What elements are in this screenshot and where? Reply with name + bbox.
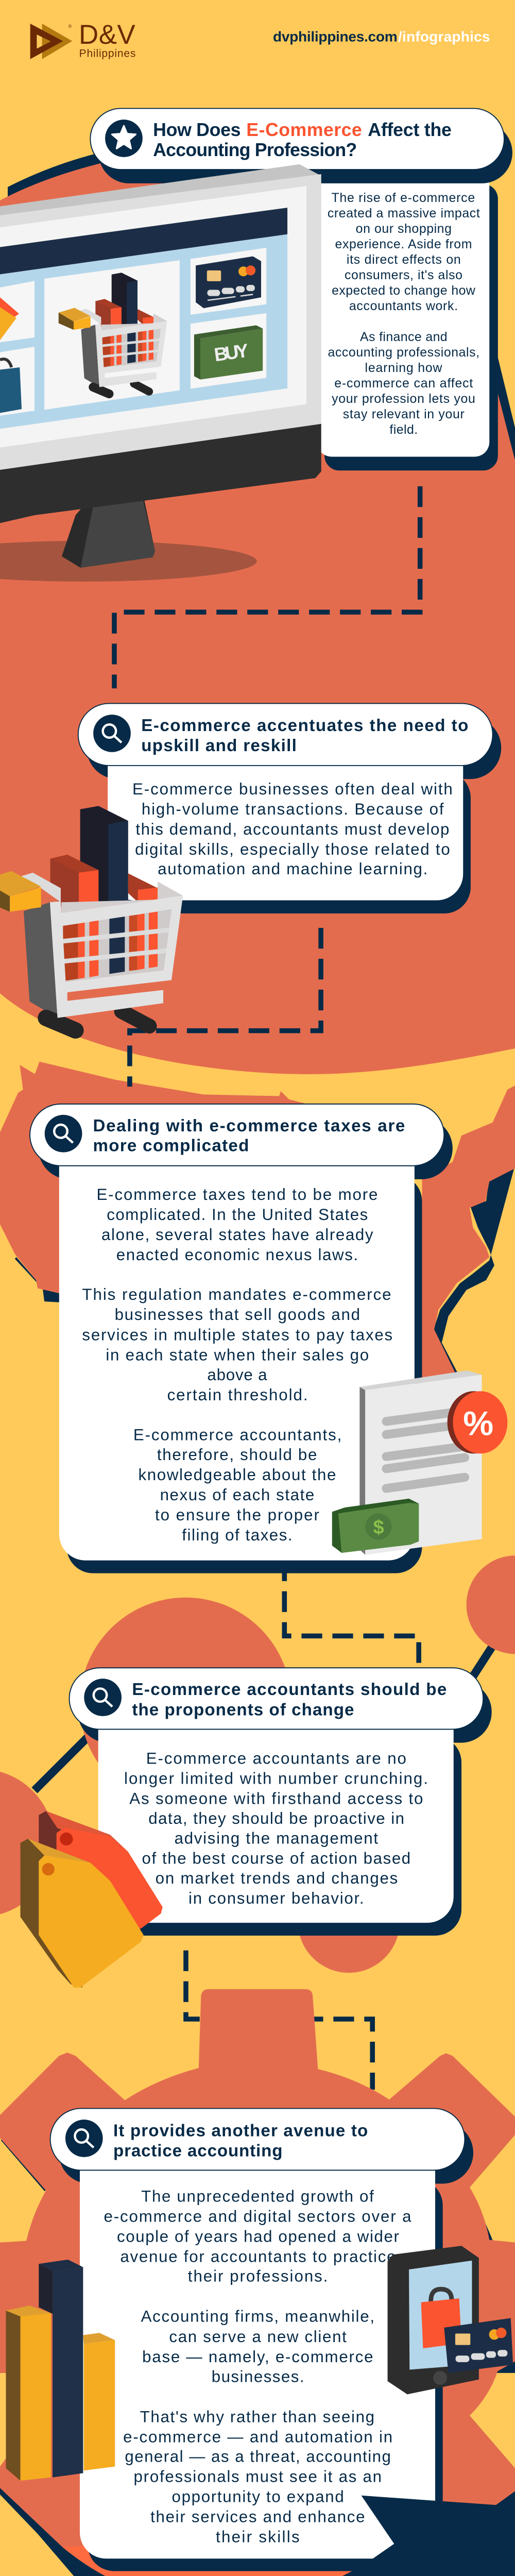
panel: intro text card: created a massive impact <box>328 206 480 221</box>
website url: dvphilippines.com <box>273 28 398 44</box>
panel: another avenue: opportunity to expand <box>172 2488 344 2506</box>
icon: computer monitor with online store <box>0 164 321 568</box>
panel: e-commerce taxes: more complicated <box>93 1137 249 1156</box>
panel: upskill and reskill: E-commerce accentuates the need to <box>141 716 468 735</box>
panel: e-commerce taxes: to ensure the proper <box>155 1506 319 1524</box>
title pill: Accounting Profession? <box>153 140 357 160</box>
panel: intro text card: on our shopping <box>356 222 452 236</box>
panel: e-commerce taxes: services in multiple states to pay taxes <box>82 1326 392 1344</box>
panel: e-commerce taxes: above a <box>207 1366 267 1384</box>
panel: proponents of change: the proponents of change <box>132 1701 354 1720</box>
panel: proponents of change: E-commerce accountants are no <box>146 1749 406 1767</box>
panel: proponents of change: in consumer behavior. <box>188 1889 364 1907</box>
icon: tax document with percent badge and cash: % <box>463 1405 493 1443</box>
panel: proponents of change: As someone with firsthand access to <box>129 1789 423 1807</box>
panel: e-commerce taxes: in each state when their sales go <box>106 1346 369 1364</box>
panel: upskill and reskill: automation and machine learning. <box>158 860 427 878</box>
panel: e-commerce taxes: This regulation mandates e-commerce <box>82 1285 391 1303</box>
network circles background <box>0 1555 515 1973</box>
panel: another avenue: base — namely, e-commerce <box>142 2348 373 2366</box>
panel: e-commerce taxes: E-commerce accountants, <box>133 1426 341 1444</box>
panel: another avenue: practice accounting <box>113 2142 282 2161</box>
panel: intro text card: expected to change how <box>332 283 476 298</box>
panel: proponents of change: of the best course of action based <box>142 1849 410 1867</box>
icon: bar chart <box>6 2260 115 2481</box>
website url: /infographics <box>398 28 490 44</box>
title pill: E-Commerce <box>246 120 362 140</box>
panel: proponents of change: advising the management <box>175 1829 378 1847</box>
panel: intro text card <box>317 171 498 470</box>
panel: e-commerce taxes: complicated. In the United States <box>107 1206 368 1224</box>
panel: upskill and reskill: upskill and reskill <box>141 736 297 755</box>
panel: another avenue <box>50 2108 473 2571</box>
logo: D&V <box>79 20 135 50</box>
panel: intro text card: The rise of e-commerce <box>331 191 475 205</box>
panel: upskill and reskill: high-volume transactions. Because of <box>142 800 444 818</box>
panel: another avenue: their services and enhance <box>150 2507 365 2526</box>
gear background <box>0 1989 515 2576</box>
panel: another avenue: It provides another avenue to <box>113 2122 368 2141</box>
panel: another avenue: couple of years had opened a wider <box>117 2227 399 2245</box>
panel: upskill and reskill: digital skills, especially those related to <box>135 840 450 858</box>
panel: another avenue: professionals must see it as an <box>134 2468 382 2486</box>
panel: e-commerce taxes: filing of taxes. <box>182 1526 293 1544</box>
panel: e-commerce taxes: Dealing with e-commerce taxes are <box>93 1116 405 1136</box>
panel: another avenue: e-commerce and digital sectors over a <box>104 2208 411 2226</box>
panel: upskill and reskill <box>78 703 501 913</box>
panel: e-commerce taxes: nexus of each state <box>160 1486 314 1504</box>
panel: upskill and reskill: this demand, accountants must develop <box>135 820 449 838</box>
dashed connector lines <box>114 486 420 2090</box>
title pill <box>90 108 512 183</box>
icon: shopping cart <box>0 806 183 1030</box>
panel: intro text card: its direct effects on <box>347 252 461 267</box>
panel: proponents of change: longer limited with number crunching. <box>124 1769 428 1787</box>
logo <box>30 20 135 59</box>
icon: computer monitor with online store: BUY <box>213 340 250 365</box>
panel: another avenue: general — as a threat, accounting <box>125 2448 391 2466</box>
website url <box>273 28 490 44</box>
panel: another avenue: can serve a new client <box>169 2328 347 2346</box>
panel: e-commerce taxes <box>30 1104 453 1573</box>
panel: proponents of change: data, they should be proactive in <box>148 1809 404 1827</box>
panel: intro text card: stay relevant in your <box>343 407 465 421</box>
panel: intro text card: accountants work. <box>349 299 458 313</box>
panel: e-commerce taxes: E-commerce taxes tend to be more <box>97 1185 377 1204</box>
logo: ® <box>68 24 72 29</box>
panel: intro text card: consumers, it's also <box>345 268 462 282</box>
panel: e-commerce taxes: therefore, should be <box>157 1446 317 1464</box>
panel: intro text card: learning how <box>365 361 442 375</box>
panel: e-commerce taxes: alone, several states have already <box>101 1226 373 1244</box>
panel: another avenue: Accounting firms, meanwhile, <box>141 2307 374 2325</box>
panel: another avenue: That's why rather than seeing <box>140 2408 374 2426</box>
panel: another avenue: e-commerce — and automation in <box>123 2428 392 2446</box>
panel: another avenue: businesses. <box>212 2368 304 2386</box>
panel: e-commerce taxes: enacted economic nexus laws. <box>116 1246 358 1264</box>
icon: phone with shopping bag and credit card <box>388 2246 513 2394</box>
panel: e-commerce taxes: knowledgeable about the <box>138 1466 336 1484</box>
logo: Philippines <box>79 47 135 59</box>
panel: intro text card: field. <box>389 422 418 437</box>
icon: tax document with percent badge and cash: $ <box>373 1516 384 1538</box>
title pill: How Does <box>153 120 241 140</box>
panel: another avenue: their skills <box>216 2528 300 2546</box>
panel: intro text card: your profession lets you <box>332 392 475 406</box>
panel: intro text card: accounting professionals, <box>328 345 479 360</box>
panel: proponents of change <box>70 1668 492 1936</box>
panel: another avenue: The unprecedented growth of <box>141 2188 374 2206</box>
panel: intro text card: experience. Aside from <box>335 237 472 251</box>
icon: price tags <box>21 1811 163 1988</box>
panel: proponents of change: E-commerce accountants should be <box>132 1680 447 1699</box>
panel: e-commerce taxes: businesses that sell goods and <box>115 1306 360 1324</box>
background blob: top section <box>0 144 515 1074</box>
gear lower crescent <box>131 2491 515 2576</box>
US map background <box>0 1062 515 1379</box>
panel: e-commerce taxes: certain threshold. <box>167 1386 308 1404</box>
panel: another avenue: their professions. <box>188 2267 328 2285</box>
icon: tax document with percent badge and cash <box>332 1370 507 1555</box>
panel: upskill and reskill: E-commerce businesses often deal with <box>132 780 453 798</box>
panel: intro text card: e-commerce can affect <box>334 376 473 391</box>
title pill: Affect the <box>368 120 452 140</box>
panel: another avenue: avenue for accountants to practice <box>120 2247 396 2265</box>
panel: proponents of change: on market trends and changes <box>156 1869 398 1887</box>
monitor stand shadow <box>0 541 257 582</box>
panel: intro text card: As finance and <box>360 330 448 344</box>
